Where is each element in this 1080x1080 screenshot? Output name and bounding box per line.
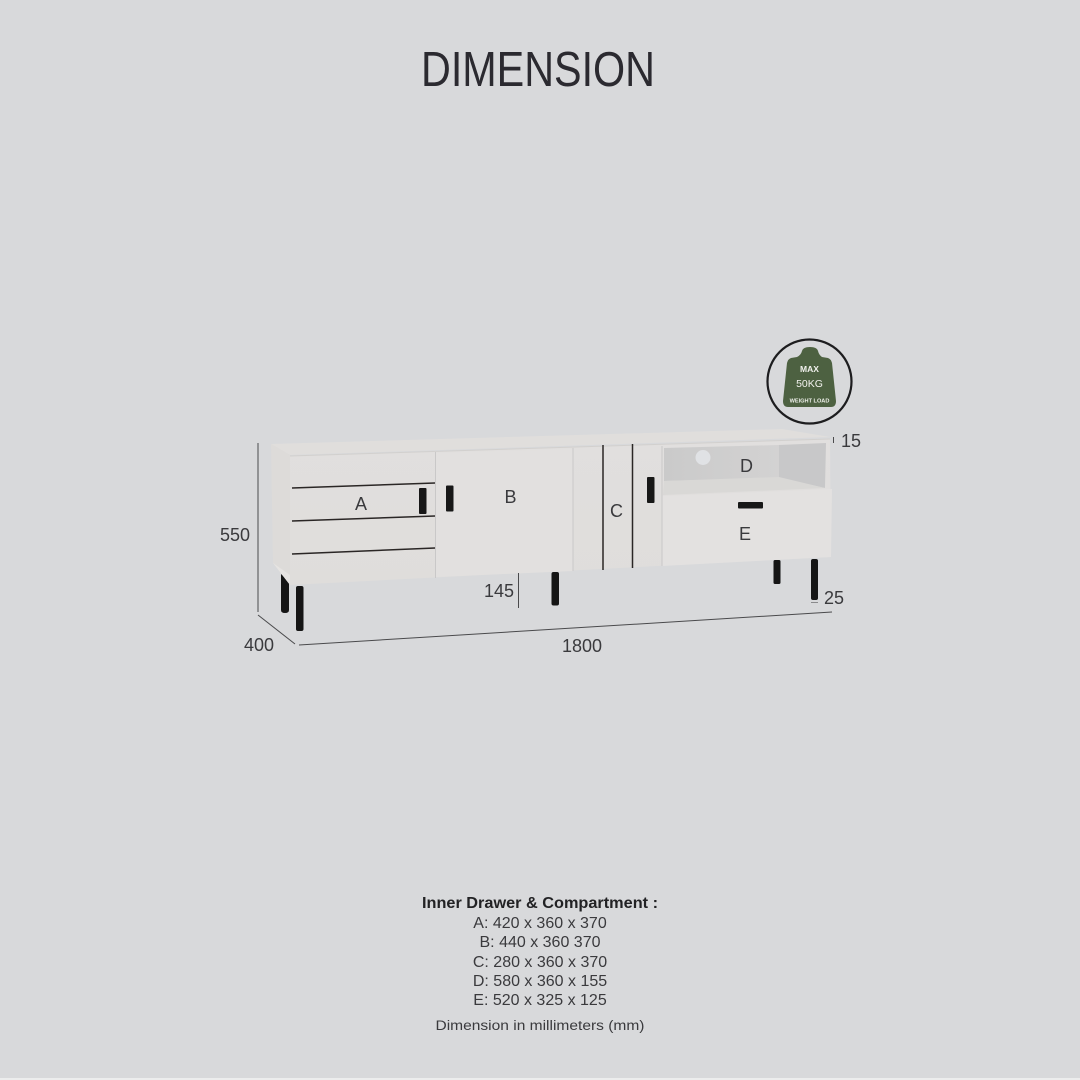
cabinet left side [271, 444, 290, 585]
dimension labels [220, 431, 861, 656]
icon: weight [783, 347, 836, 407]
furniture: TV console [271, 429, 832, 631]
dimension labels: 400 [244, 635, 274, 655]
badge: max weight load: 50KG [796, 378, 823, 390]
compartment letters: C [610, 501, 623, 521]
dimensions list [473, 915, 607, 1009]
drawer grooves A [292, 483, 435, 554]
dimension labels: 550 [220, 525, 250, 545]
front legs [296, 559, 818, 631]
badge: max weight load [768, 340, 852, 424]
cabinet top surface [271, 429, 830, 455]
dimensions list: B: 440 x 360 370 [480, 934, 601, 951]
handles [419, 477, 763, 514]
dimension labels: 1800 [562, 636, 602, 656]
compartment letters [355, 456, 753, 544]
dimension lines [258, 437, 834, 645]
title: DIMENSION [421, 43, 655, 97]
badge: max weight load: MAX [800, 364, 819, 374]
heading: Inner Drawer & Compartment : [422, 895, 658, 912]
compartment letters: D [740, 456, 753, 476]
text block: inner drawer and compartment [422, 895, 658, 1033]
open compartment D [663, 443, 826, 495]
compartment letters: E [739, 524, 751, 544]
dimensions list: D: 580 x 360 x 155 [473, 973, 607, 990]
compartment letters: A [355, 494, 367, 514]
footnote: Dimension in millimeters (mm) [436, 1018, 644, 1033]
dimensions list: A: 420 x 360 x 370 [473, 915, 607, 932]
vertical grooves C [603, 444, 632, 570]
panel seams [436, 446, 662, 578]
dimension labels: 15 [841, 431, 861, 451]
back legs [281, 560, 780, 613]
dimensions list: E: 520 x 325 x 125 [473, 992, 607, 1009]
front top edge highlight [290, 439, 830, 456]
dimension labels: 145 [484, 581, 514, 601]
dimension labels: 25 [824, 588, 844, 608]
cabinet front [290, 439, 831, 585]
badge: max weight load: WEIGHT LOAD [790, 398, 829, 404]
dimensions list: C: 280 x 360 x 370 [473, 954, 607, 971]
compartment letters: B [504, 487, 517, 507]
